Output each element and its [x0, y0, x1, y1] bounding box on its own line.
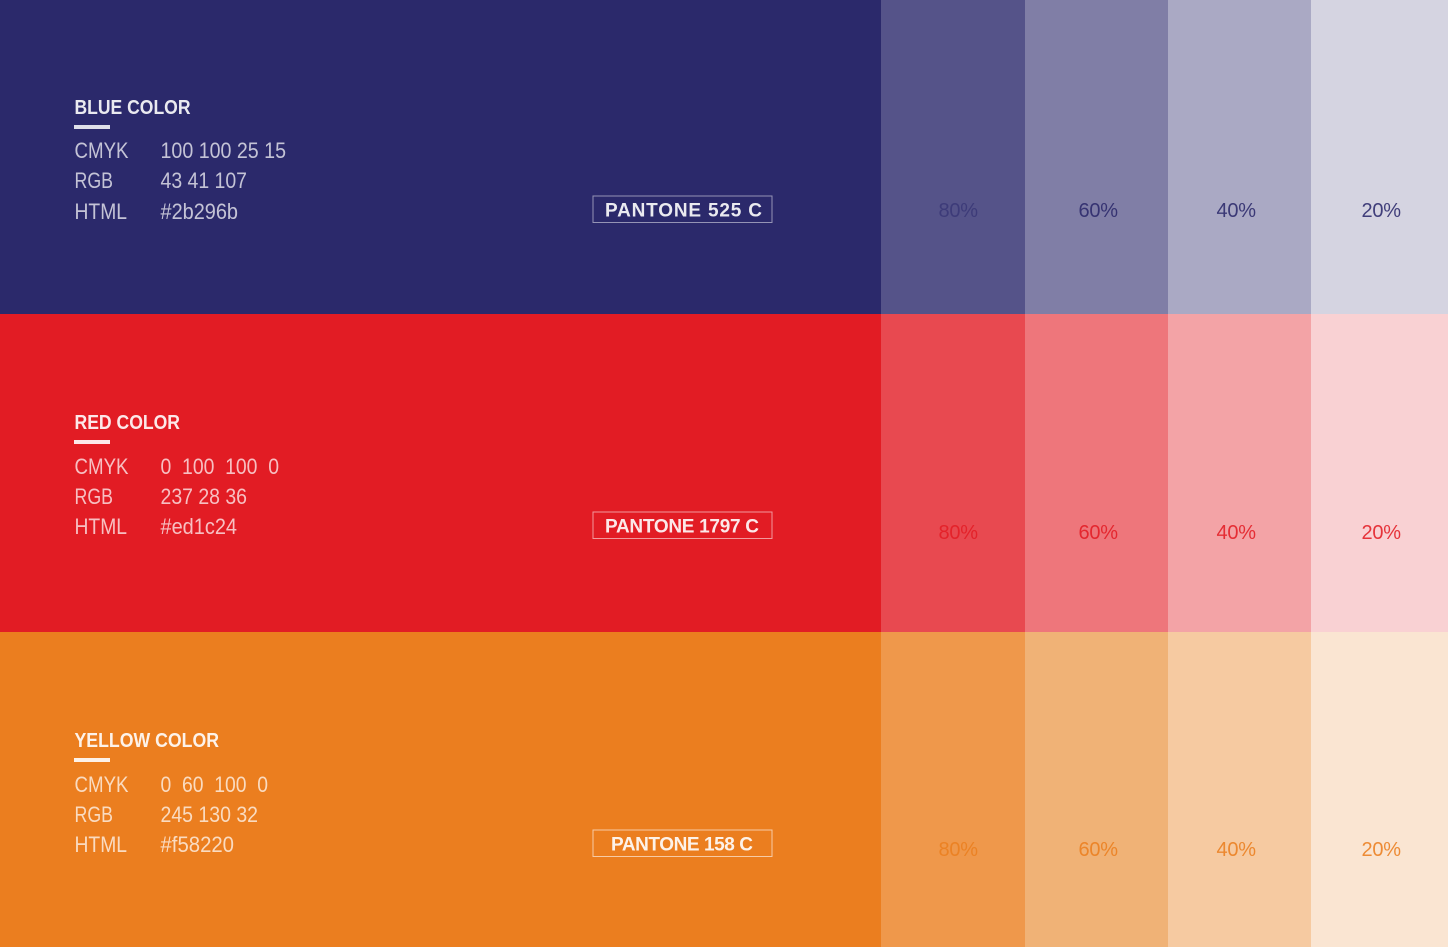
blue tints: 80%: [938, 200, 978, 222]
yellow color values: [74, 772, 268, 857]
yellow color values: 0 60 100 0: [160, 772, 268, 797]
yellow tints: 60%: [1078, 839, 1118, 861]
red color values: [74, 454, 279, 539]
yellow main swatch: [0, 632, 881, 947]
blue color values: HTML: [74, 199, 127, 224]
blue color values: #2b296b: [160, 199, 238, 224]
blue heading underline: [74, 125, 110, 129]
yellow pantone label: [593, 830, 772, 856]
blue pantone label: [593, 196, 772, 222]
red pantone label: PANTONE 1797 C: [605, 516, 759, 538]
yellow color values: RGB: [74, 802, 113, 827]
red tints: 40%: [1216, 522, 1256, 544]
yellow color values: #f58220: [160, 832, 234, 857]
blue tints: 20%: [1362, 200, 1401, 222]
red main swatch: [0, 314, 881, 632]
yellow tints: 40%: [1216, 839, 1256, 861]
blue color values: 43 41 107: [160, 168, 247, 193]
red color values: 237 28 36: [160, 484, 247, 509]
yellow color values: 245 130 32: [160, 802, 258, 827]
yellow tints: 80%: [938, 839, 978, 861]
red heading underline: [74, 440, 110, 444]
blue color values: RGB: [74, 168, 113, 193]
red tints: 60%: [1078, 522, 1118, 544]
blue tints: 40%: [1216, 200, 1256, 222]
blue main swatch: [0, 0, 881, 314]
blue color heading: BLUE COLOR: [74, 97, 191, 119]
yellow color values: CMYK: [74, 772, 129, 797]
yellow color values: HTML: [74, 832, 127, 857]
panel: yellow color row: [0, 632, 1448, 947]
red tints: 20%: [1362, 522, 1401, 544]
red color values: #ed1c24: [160, 514, 237, 539]
red tints: [881, 314, 1448, 632]
red pantone label: [593, 512, 772, 538]
yellow tints: 20%: [1362, 839, 1401, 861]
red color values: RGB: [74, 484, 113, 509]
blue tints: 60%: [1078, 200, 1118, 222]
blue color values: CMYK: [74, 138, 129, 163]
red tints: 80%: [938, 522, 978, 544]
blue color values: 100 100 25 15: [160, 138, 286, 163]
red color values: HTML: [74, 514, 127, 539]
yellow pantone label: PANTONE 158 C: [611, 834, 753, 856]
blue tints: [881, 0, 1448, 314]
blue pantone label: PANTONE 525 C: [605, 200, 762, 222]
blue color values: [74, 138, 286, 224]
yellow color heading: YELLOW COLOR: [74, 730, 219, 752]
red color heading: RED COLOR: [74, 412, 180, 434]
panel: blue color row: [0, 0, 1448, 314]
panel: red color row: [0, 314, 1448, 632]
yellow tints: [881, 632, 1448, 947]
yellow heading underline: [74, 758, 110, 762]
red color values: 0 100 100 0: [160, 454, 279, 479]
red color values: CMYK: [74, 454, 129, 479]
